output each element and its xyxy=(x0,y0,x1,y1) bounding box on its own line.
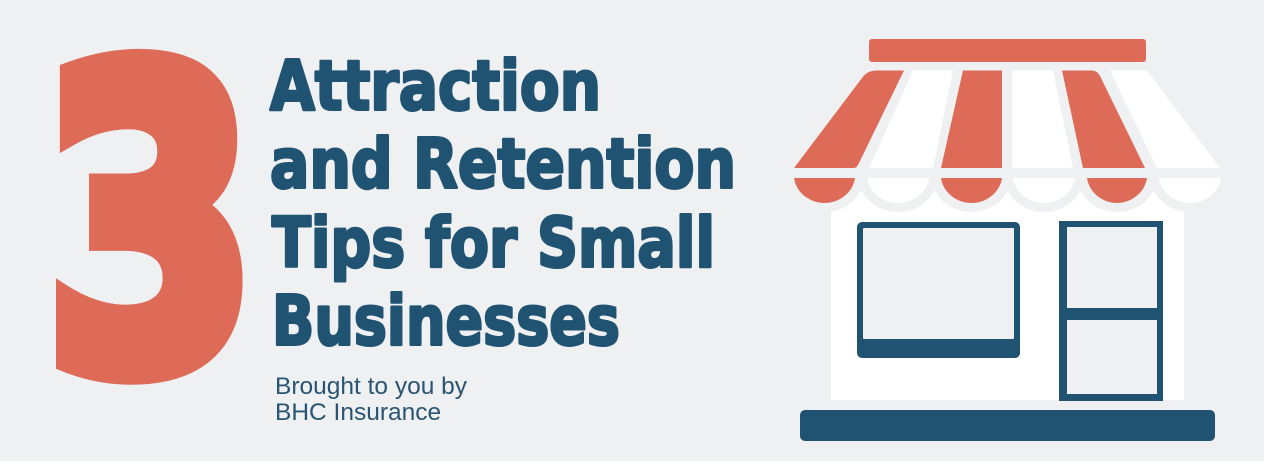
awning scallops xyxy=(794,178,1221,203)
scallop halos xyxy=(786,144,1229,212)
byline: Brought to you by xyxy=(275,373,468,400)
title xyxy=(270,46,736,362)
title: Attraction xyxy=(270,46,601,126)
title: and Retention xyxy=(270,124,736,204)
pavement base xyxy=(800,410,1215,441)
awning top bar xyxy=(869,39,1146,62)
big number 3: 3 xyxy=(40,0,257,462)
byline xyxy=(275,373,468,426)
awning stripes xyxy=(794,70,1220,168)
shop window xyxy=(857,222,1020,358)
door xyxy=(1059,221,1163,401)
title: Businesses xyxy=(272,282,620,362)
byline: BHC Insurance xyxy=(275,399,441,426)
building wall xyxy=(831,190,1184,400)
title: Tips for Small xyxy=(272,204,715,284)
storefront illustration xyxy=(786,39,1229,441)
